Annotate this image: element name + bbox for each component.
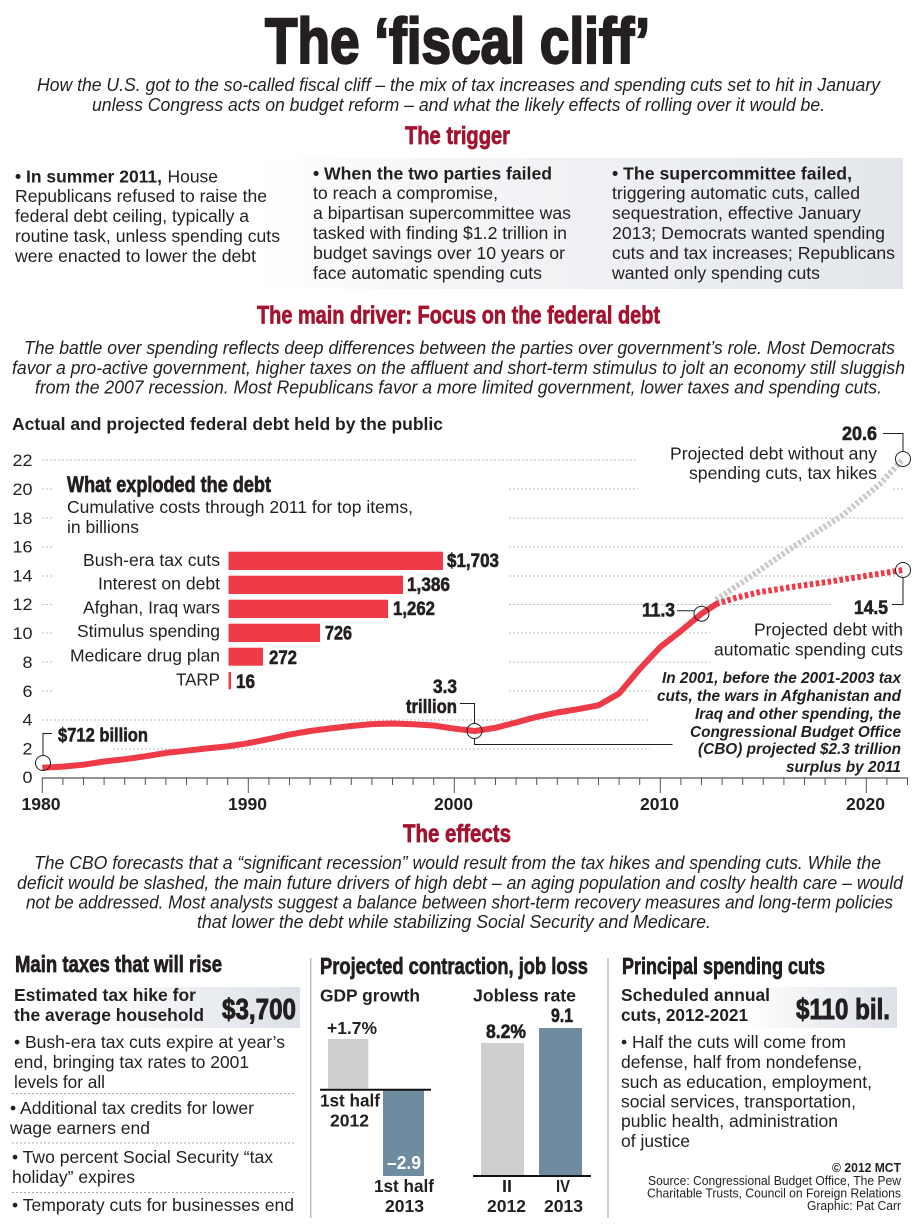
- x axis: 1990: [228, 794, 267, 814]
- text: Bush-era tax cuts: [14, 1032, 285, 1092]
- text: half the cuts: such as education, employment,: [621, 1072, 872, 1092]
- text block: supercommittee failed: • The supercommittee failed,: [612, 164, 852, 184]
- text block: supercommittee failed: triggering automatic cuts, called: [612, 183, 860, 203]
- divider lines: [12, 1094, 296, 1192]
- callout: tax hike: $3,700: [222, 994, 296, 1026]
- y axis labels: 22: [12, 451, 32, 470]
- note: CBO projection: (CBO) projected $2.3 trillion: [698, 741, 901, 758]
- text block: supercommittee failed: wanted only spending cuts: [611, 263, 820, 283]
- heading: the main driver: The main driver: Focus on the federal debt: [257, 302, 661, 330]
- text block: summer 2011: federal debt ceiling, typically a: [15, 206, 249, 226]
- text block: two parties failed: [313, 164, 571, 283]
- bar: Medicare drug plan: Medicare drug plan: [70, 646, 220, 666]
- panel: what exploded the debt: [67, 472, 499, 693]
- subtitle: How the U.S. got to the so-called fiscal cliff – the mix of tax increases and spending cuts set to hit in January: [37, 74, 882, 95]
- bar: interest on debt: Interest on debt: [98, 574, 220, 594]
- panel: principal spending cuts: [621, 953, 897, 1151]
- text block: effects intro: The CBO forecasts that a “significant recession” would result from the tax hikes and spending cuts. While the: [34, 852, 881, 873]
- callout: 14.5: Projected debt with: [754, 620, 903, 640]
- callout: $712 billion: [36, 724, 148, 770]
- text: tax holiday: [12, 1147, 273, 1187]
- credits: [647, 1160, 902, 1213]
- red debt line: [42, 603, 718, 768]
- bar chart: GDP growth: 2013: [385, 1196, 424, 1216]
- bar: Bush-era tax cuts: [83, 550, 499, 572]
- x axis: 2010: [640, 794, 679, 814]
- bar chart: GDP growth: +1.7%: [327, 1018, 377, 1038]
- text: Bush-era tax cuts: • Bush-era tax cuts expire at year’s: [14, 1032, 285, 1052]
- y axis labels: 2: [22, 740, 32, 758]
- callout: 11.3: 11.3: [642, 600, 675, 622]
- subtitle: unless Congress acts on budget reform – and what the likely effects of rolling over it would be.: [92, 94, 825, 115]
- text block: two parties failed: tasked with finding $1.2 trillion in: [313, 223, 567, 243]
- x axis: 2020: [846, 794, 885, 814]
- heading: the trigger: The trigger: [405, 122, 510, 150]
- callout: 14.5: automatic spending cuts: [714, 640, 903, 660]
- panel: the trigger: [14, 158, 903, 289]
- text block: summer 2011: [14, 166, 280, 266]
- bar chart: GDP growth: 1st half: [320, 1091, 380, 1111]
- bar chart: GDP growth: 1st half: [374, 1176, 434, 1196]
- bar: TARP: TARP: [176, 670, 220, 690]
- bar chart: jobless rate: [473, 986, 591, 1216]
- bar chart: jobless rate: 2012: [487, 1196, 526, 1216]
- panel subtitle: in billions: [67, 517, 139, 537]
- text: tax holiday: • Two percent Social Security “tax: [12, 1147, 273, 1167]
- credits: Source: Congressional Budget Office, The Pew: [648, 1173, 902, 1188]
- callout: scheduled annual cuts: Scheduled annual: [621, 985, 770, 1005]
- x axis: [22, 778, 908, 814]
- callout: tax hike: Estimated tax hike for: [14, 985, 196, 1005]
- bar chart: jobless rate: IV: [556, 1176, 570, 1196]
- bar: stimulus spending: Stimulus spending: [77, 621, 220, 641]
- text: half the cuts: • Half the cuts will come from: [621, 1032, 846, 1052]
- callout: 3.3 trillion: trillion: [406, 696, 457, 718]
- text block: two parties failed: • When the two parties failed: [313, 164, 552, 184]
- bar: Bush-era tax cuts: Bush-era tax cuts: [83, 550, 220, 570]
- callout: 14.5: [714, 562, 910, 660]
- text block: supercommittee failed: cuts and tax increases; Republicans: [612, 243, 895, 263]
- panel subtitle: Cumulative costs through 2011 for top items,: [67, 497, 413, 517]
- chart title: Actual and projected federal debt held by the public: [12, 414, 443, 434]
- text: tax credits: • Additional tax credits for lower: [10, 1098, 254, 1118]
- y axis labels: 6: [22, 682, 32, 701]
- note: CBO projection: [657, 670, 902, 776]
- chart gridlines: [42, 460, 905, 749]
- y axis labels: [12, 451, 32, 787]
- bar chart: GDP growth: GDP growth: [320, 986, 420, 1006]
- panel divider: [311, 958, 608, 1218]
- callout: 20.6: Projected debt without any: [670, 444, 877, 464]
- text: business cuts: • Temporaty cuts for businesses end: [12, 1195, 294, 1215]
- bar chart: jobless rate: 8.2%: [486, 1021, 526, 1043]
- note: CBO projection: surplus by 2011: [786, 759, 901, 776]
- bar chart: jobless rate: 9.1: [551, 1005, 573, 1027]
- panel heading: Projected contraction, job loss: [320, 953, 588, 979]
- text block: summer 2011: were enacted to lower the debt: [14, 246, 256, 266]
- text block: summer 2011: routine task, unless spending cuts: [15, 226, 280, 246]
- note: CBO projection: In 2001, before the 2001-2003 tax: [662, 670, 902, 687]
- note: CBO projection: cuts, the wars in Afghanistan and: [657, 688, 902, 705]
- text block: two parties failed: to reach a compromise,: [313, 183, 498, 203]
- text: half the cuts: public health, administration: [621, 1111, 838, 1131]
- callout: 3.3 trillion: [406, 676, 672, 744]
- text block: two parties failed: face automatic spending cuts: [313, 263, 542, 283]
- line chart: federal debt: [12, 423, 910, 814]
- text block: two parties failed: budget savings over 10 years or: [313, 243, 565, 263]
- text block: effects intro: that lower the debt while stabilizing Social Security and Medicare.: [197, 911, 711, 932]
- text: tax credits: [9, 1098, 254, 1138]
- text: half the cuts: defense, half from nondefense,: [621, 1052, 862, 1072]
- bar: TARP: 16: [236, 671, 255, 693]
- bar: Afghan, Iraq wars: Afghan, Iraq wars: [83, 598, 220, 618]
- title: The ‘fiscal cliff’: [265, 5, 650, 77]
- text: half the cuts: of justice: [621, 1131, 690, 1151]
- note: CBO projection: Congressional Budget Office: [690, 724, 901, 741]
- callout: 3.3 trillion: 3.3: [433, 676, 457, 698]
- y axis labels: 8: [22, 653, 32, 672]
- callout: 14.5: 14.5: [854, 597, 888, 619]
- text block: effects intro: [17, 852, 904, 932]
- text block: effects intro: deficit would be slashed, the main future drivers of high debt – an aging population and coslty health care – would: [17, 872, 904, 893]
- credits: © 2012 MCT: [832, 1160, 901, 1175]
- text block: main driver intro: [12, 337, 905, 398]
- callout: $712 billion: $712 billion: [58, 724, 148, 746]
- text block: two parties failed: a bipartisan supercommittee was: [313, 203, 571, 223]
- credits: Graphic: Pat Carr: [807, 1198, 902, 1213]
- text: half the cuts: [621, 1032, 872, 1151]
- bar: Bush-era tax cuts: $1,703: [447, 550, 499, 572]
- y axis labels: 10: [12, 624, 32, 643]
- y axis labels: 18: [12, 509, 32, 528]
- callout: 20.6: 20.6: [842, 423, 877, 445]
- bar: interest on debt: 1,386: [407, 574, 450, 596]
- bar: Medicare drug plan: 272: [269, 647, 297, 669]
- red dashed projection line: [716, 570, 903, 604]
- bar: Afghan, Iraq wars: [83, 598, 435, 620]
- x axis: 1980: [22, 794, 61, 814]
- bar chart: GDP growth: [320, 986, 434, 1216]
- text block: summer 2011: • In summer 2011,: [15, 166, 162, 186]
- y axis labels: 4: [22, 710, 32, 730]
- callout: tax hike: [14, 985, 300, 1028]
- text block: supercommittee failed: sequestration, effective January: [612, 203, 861, 223]
- callout: scheduled annual cuts: $110 bil.: [796, 994, 890, 1026]
- text block: summer 2011: Republicans refused to raise the: [15, 186, 267, 206]
- text block: supercommittee failed: [611, 164, 895, 283]
- y axis labels: 20: [12, 480, 32, 499]
- callout: 20.6: [670, 423, 910, 483]
- panel: main taxes that will rise: [9, 951, 300, 1215]
- subtitle: [37, 74, 882, 115]
- callout: tax hike: the average household: [14, 1005, 204, 1025]
- credits: Charitable Trusts, Council on Foreign Relations: [647, 1186, 901, 1200]
- bar: Medicare drug plan: [70, 646, 297, 669]
- bar: Afghan, Iraq wars: 1,262: [393, 598, 435, 620]
- callout: scheduled annual cuts: [621, 985, 897, 1028]
- heading: the effects: The effects: [403, 820, 511, 848]
- panel heading: What exploded the debt: [67, 472, 272, 497]
- bar: TARP: [176, 670, 255, 693]
- text block: summer 2011: House: [168, 166, 218, 186]
- y axis labels: 12: [12, 595, 32, 614]
- y axis labels: 16: [12, 538, 32, 556]
- bar: stimulus spending: 726: [325, 622, 352, 644]
- bar chart: jobless rate: II: [502, 1176, 512, 1196]
- callout: 11.3: [642, 600, 709, 622]
- gray dotted projection line: [716, 459, 903, 600]
- text: Bush-era tax cuts: levels for all: [14, 1072, 105, 1092]
- text: tax holiday: holiday” expires: [12, 1167, 135, 1187]
- text block: main driver intro: from the 2007 recession. Most Republicans favor a more limited government, lower taxes and spending cuts.: [35, 376, 882, 398]
- text: tax credits: wage earners end: [9, 1118, 150, 1138]
- panel heading: Principal spending cuts: [622, 953, 825, 979]
- callout: 20.6: spending cuts, tax hikes: [689, 463, 877, 483]
- text: Bush-era tax cuts: end, bringing tax rates to 2001: [14, 1052, 249, 1072]
- bar: interest on debt: [98, 574, 450, 596]
- bar: stimulus spending: [77, 621, 352, 644]
- bar chart: jobless rate: Jobless rate: [473, 986, 576, 1006]
- callout: scheduled annual cuts: cuts, 2012-2021: [621, 1005, 748, 1025]
- bar chart: jobless rate: 2013: [544, 1196, 583, 1216]
- panel: projected contraction, job loss: [320, 953, 591, 1216]
- note: CBO projection: Iraq and other spending, the: [695, 706, 901, 723]
- panel subtitle: [67, 497, 413, 537]
- panel background: [255, 158, 903, 289]
- text: half the cuts: social services, transportation,: [621, 1092, 856, 1112]
- text block: supercommittee failed: 2013; Democrats wanted spending: [612, 223, 885, 243]
- panel heading: Main taxes that will rise: [15, 951, 222, 977]
- bar chart: GDP growth: 2012: [330, 1111, 369, 1131]
- text block: main driver intro: The battle over spending reflects deep differences between the parties over government’s role. Most Democrats: [24, 337, 895, 358]
- bar chart: GDP growth: –2.9: [387, 1153, 421, 1173]
- x axis: 2000: [434, 794, 473, 814]
- y axis labels: 14: [12, 566, 32, 586]
- y axis labels: 0: [22, 768, 32, 787]
